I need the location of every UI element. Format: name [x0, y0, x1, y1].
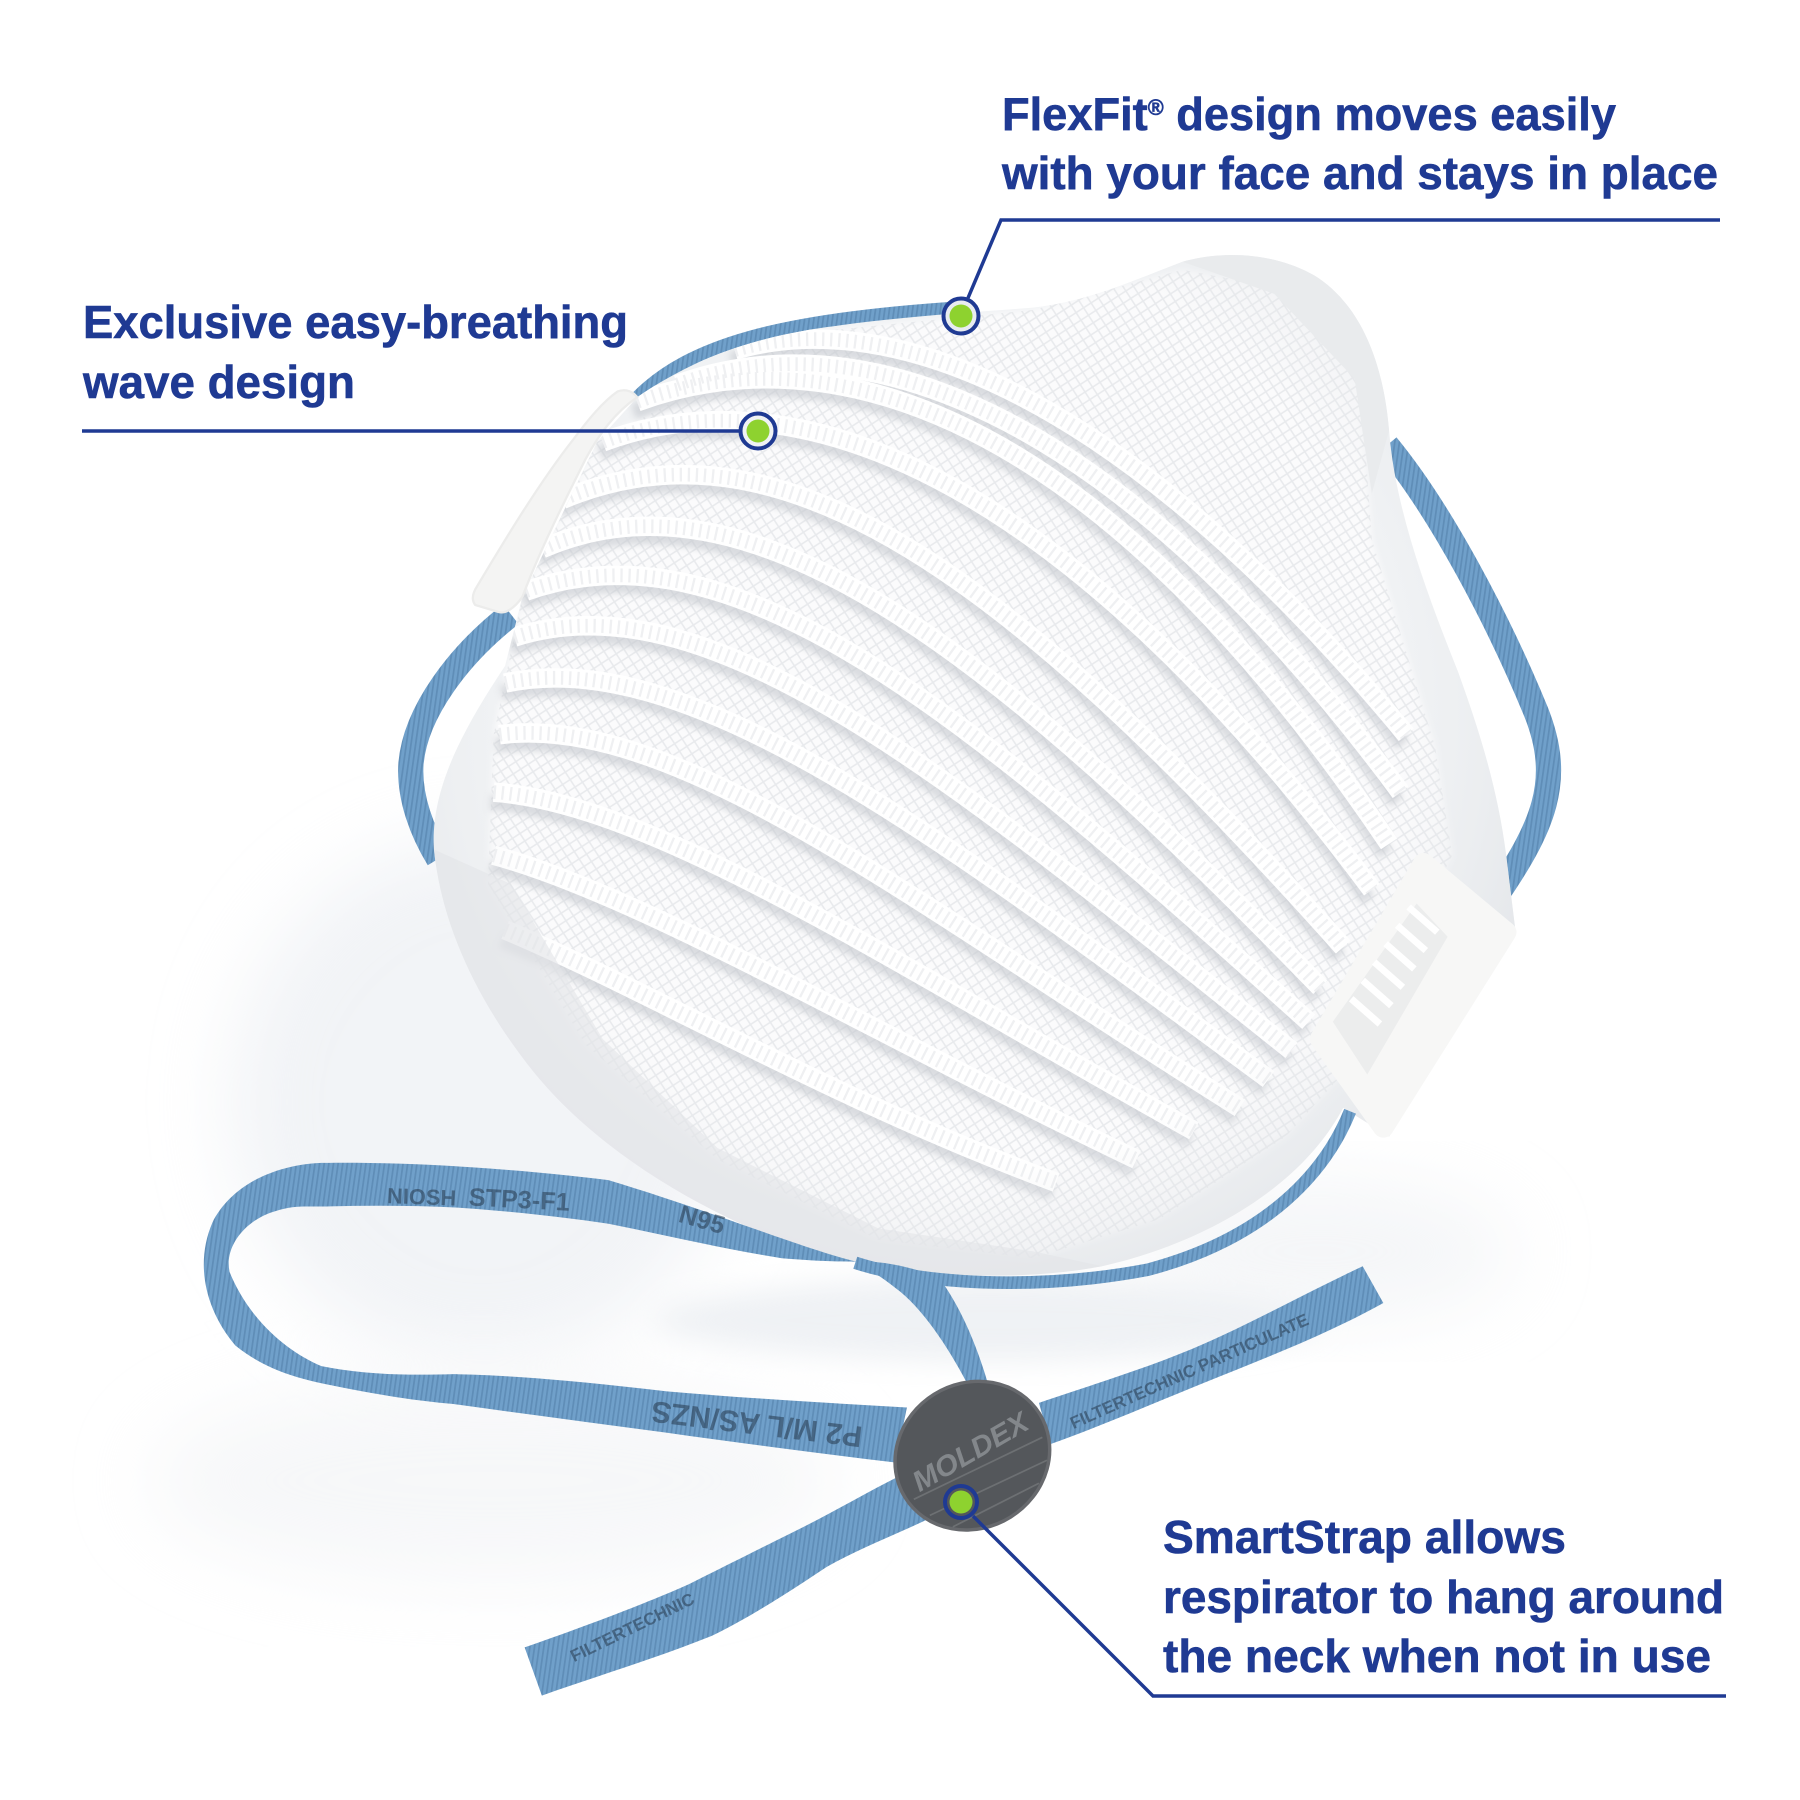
strap: lower band under mask: [855, 1111, 1350, 1283]
leader line: [968, 220, 1720, 298]
strap: top section: [637, 308, 959, 397]
callout text: ®: [1148, 95, 1164, 120]
printed strap text: STP3-F1: [468, 1183, 570, 1217]
printed strap text: NIOSH: [387, 1183, 457, 1211]
strap: left free end: [525, 1475, 936, 1696]
callout text: design moves easily: [1164, 88, 1616, 140]
callout text: FlexFit: [1002, 88, 1150, 140]
soft background shadows: [149, 838, 1515, 1584]
strap: left free end: FILTERTECHNIC: [567, 1589, 697, 1666]
button logo: MOLDEX: [907, 1405, 1036, 1498]
strap: second strand into button: [856, 1262, 990, 1391]
outer rim: [434, 255, 1515, 1276]
leader line: [82, 429, 740, 433]
product photo: respirator: [149, 230, 1550, 1696]
marker dot: [740, 414, 776, 448]
callout text: respirator to hang around: [1163, 1571, 1724, 1623]
strap: right free end: [1039, 1266, 1383, 1444]
callout text: [1163, 1511, 1724, 1682]
marker dot: [945, 1486, 977, 1518]
callout text: wave design: [82, 356, 355, 408]
callout text: the neck when not in use: [1163, 1630, 1711, 1682]
strap: right back section: [1387, 445, 1549, 901]
strap: main loop: [204, 1163, 907, 1463]
callout: FlexFit design: [944, 88, 1720, 334]
printed strap text: P2 M/L AS/NZS: [650, 1394, 864, 1453]
callout text: [1001, 88, 1718, 199]
strap: left back section: [411, 614, 511, 859]
right strap tab: [1320, 863, 1506, 1127]
left strap tab: [473, 390, 637, 612]
printed strap text: [387, 1183, 864, 1453]
callout: SmartStrap: [945, 1486, 1726, 1696]
mask body: [434, 255, 1515, 1276]
callout text: SmartStrap allows: [1163, 1511, 1566, 1563]
printed strap text: N95: [676, 1200, 728, 1240]
callout: wave design: [82, 296, 776, 448]
callout text: [82, 296, 628, 408]
strap adjuster button: [867, 1352, 1078, 1559]
strap: right free end: FILTERTECHNIC PARTICULATE: [1067, 1309, 1312, 1433]
leader line: [973, 1516, 1726, 1696]
callout text: with your face and stays in place: [1001, 147, 1718, 199]
marker dot: [944, 298, 978, 334]
callout text: Exclusive easy-breathing: [83, 296, 628, 348]
mesh area: [434, 255, 1515, 1276]
